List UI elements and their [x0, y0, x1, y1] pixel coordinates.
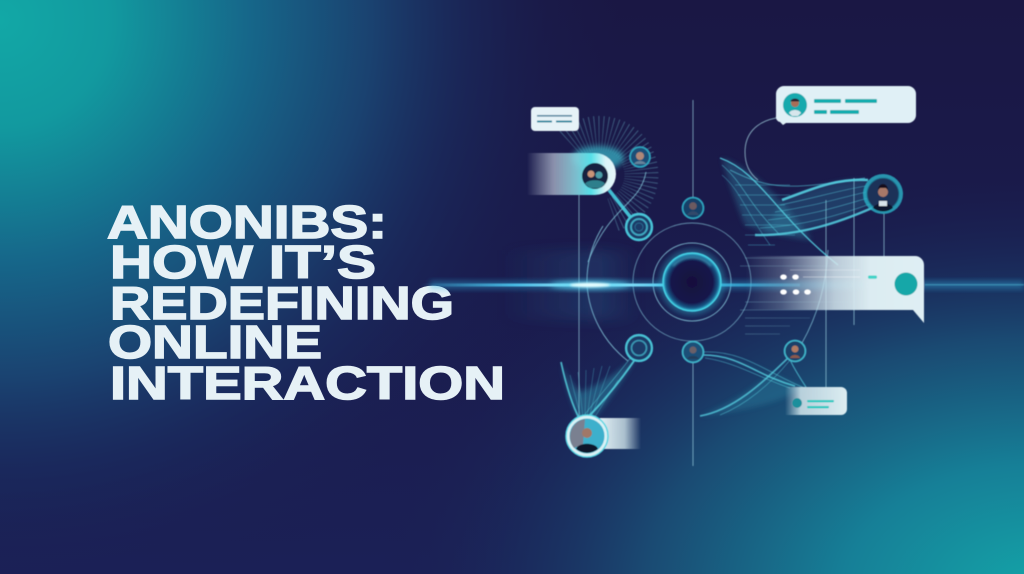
upper wave fan: [720, 158, 872, 265]
network rings and arcs: [587, 172, 828, 361]
small chat bubble lower right: [785, 387, 847, 415]
avatar node top left: [630, 147, 650, 167]
ring node upper: [626, 214, 652, 240]
burst rays around left pill: [571, 133, 641, 215]
title: ONLINE: [108, 316, 322, 368]
connector to ring node: [609, 190, 632, 219]
title: ANONIBS:: [107, 196, 387, 248]
title: REDEFINING: [110, 277, 454, 329]
title: [107, 196, 505, 409]
small chat bubble top left: [531, 107, 579, 131]
vertical connector lines: [579, 100, 884, 466]
ring node lower left: [626, 335, 652, 361]
left gradient pill with avatar: [527, 153, 616, 195]
avatar node top centre: [682, 198, 704, 218]
horizontal data lines: [740, 258, 860, 334]
bottom left avatar with fading bar: [566, 415, 641, 457]
network diagram: [420, 86, 1024, 466]
light beam: [420, 250, 1024, 320]
lower-left burst fan: [561, 352, 640, 420]
avatar node right: [863, 174, 903, 214]
thin arc from bubble: [745, 118, 776, 180]
right chat bubble: [745, 256, 924, 323]
top right chat bubble: [776, 86, 916, 125]
avatar node lower centre: [682, 342, 704, 362]
title: HOW IT’S: [110, 236, 376, 288]
lower wave fan: [700, 352, 806, 416]
title: INTERACTION: [110, 357, 505, 409]
avatar node lower right: [784, 340, 806, 362]
central orb: [659, 249, 725, 315]
